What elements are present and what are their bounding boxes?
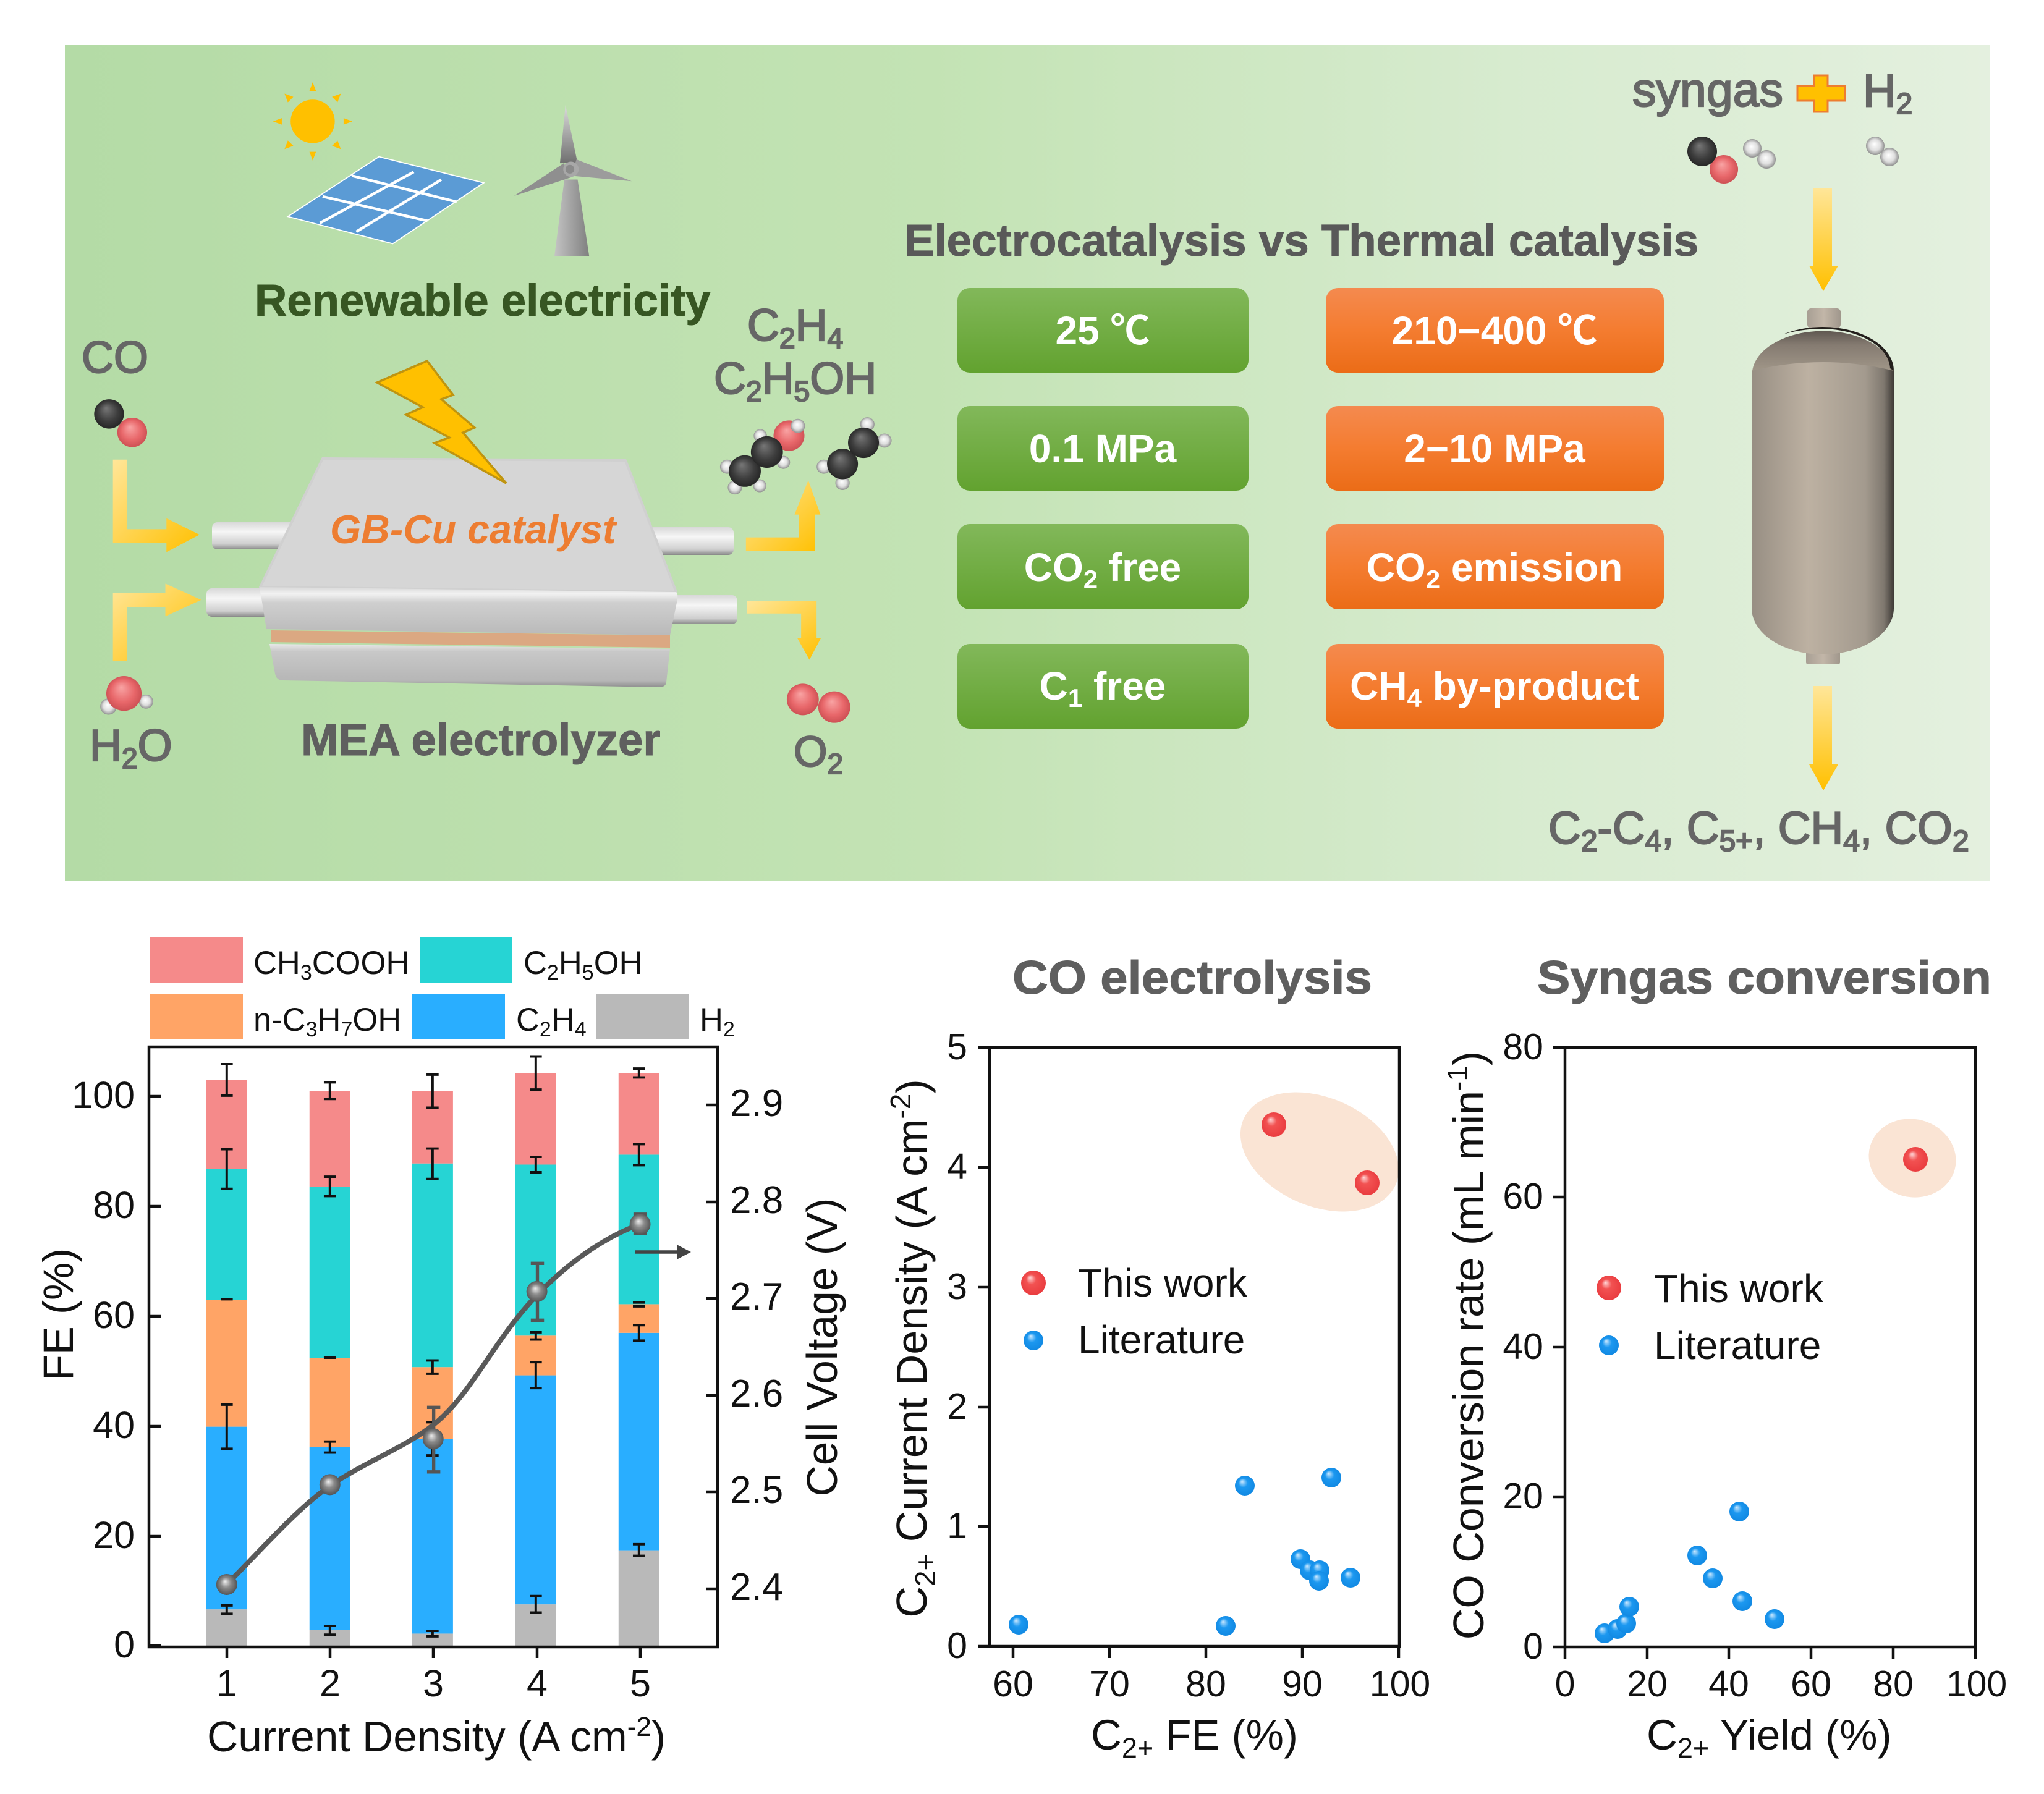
axes frame (149, 1047, 718, 1658)
label: ethylene: 4 (828, 322, 843, 354)
icon: plus (1797, 75, 1845, 112)
legend: products: C (524, 945, 547, 981)
axis title: C2+ FE: C (1091, 1711, 1122, 1759)
label: oxygen: O (794, 727, 827, 776)
label: ethanol: 5 (794, 375, 810, 407)
icon: CO molecule (94, 399, 147, 447)
label: syngas: syngas (1632, 64, 1783, 117)
label: thermal products: 4 (1645, 825, 1661, 858)
chart: Faradaic efficiency stacked bars (35, 937, 846, 1761)
axis title: C2+ yield: 2+ (1677, 1732, 1709, 1764)
card: pressure 2-10 (1326, 406, 1664, 491)
axis title: C2+ FE: 2+ (1122, 1732, 1153, 1764)
axis title: CO conversion rate: -1 (1441, 1065, 1474, 1091)
arrow: CO feed (113, 460, 200, 552)
legend: products: H (318, 1002, 341, 1038)
label: thermal products: , CH (1753, 803, 1843, 853)
heading: renewable electricity: Renewable electricity (255, 276, 710, 326)
heading: syngas conversion: Syngas conversion (1537, 952, 1991, 1004)
FE axis numbers: 40 (93, 1404, 135, 1446)
y axis numbers (947, 1026, 967, 1666)
y axis numbers: 1 (947, 1505, 967, 1546)
label: hydrogen: H (1863, 65, 1896, 116)
point: this work (1903, 1147, 1928, 1172)
voltage axis numbers: 2.7 (730, 1276, 783, 1318)
points: this work (1262, 1112, 1380, 1195)
axis title: C2+ yield: C (1647, 1711, 1677, 1759)
legend: products: H (551, 1002, 575, 1038)
label: ethanol: H (762, 354, 794, 404)
axis title: C2+ yield: Yield (%) (1709, 1711, 1891, 1759)
card: CO2 emission: CO (1367, 545, 1426, 590)
comparison: thermal catalysis conditions (1326, 288, 1664, 729)
card: CO2 free: CO (1024, 545, 1083, 590)
arrow: water feed (113, 583, 201, 661)
y axis numbers: 60 (1503, 1176, 1543, 1217)
card: CO2 free (957, 524, 1249, 609)
chart: syngas conversion scatter (1441, 1026, 2007, 1764)
voltage axis numbers: 2.6 (730, 1373, 783, 1415)
legend: products: 2 (547, 961, 559, 984)
axis title: C2+ FE: FE (%) (1153, 1711, 1298, 1759)
voltage axis numbers: 2.4 (730, 1566, 783, 1609)
label: water: O (138, 721, 172, 771)
legend: Literature (1078, 1318, 1245, 1362)
arrow: feed into reactor (1809, 188, 1838, 291)
y axis numbers: 3 (947, 1266, 967, 1307)
arrowhead (677, 1245, 691, 1259)
voltage axis numbers: 2.9 (730, 1082, 783, 1125)
heading: electrocatalysis vs thermal catalysis: Electrocatalysis vs Thermal catalysis (904, 216, 1698, 266)
y axis numbers: 5 (947, 1026, 967, 1067)
label: thermal products: C (1548, 803, 1581, 853)
label: ethylene: H (795, 301, 828, 350)
arrow: out of reactor (1809, 686, 1838, 790)
label: water: H (90, 721, 122, 771)
label: thermal products: , C (1661, 803, 1719, 853)
FE axis numbers: 100 (72, 1074, 135, 1116)
label: thermal products: 2 (1953, 825, 1969, 858)
x axis numbers: 80 (1873, 1664, 1914, 1704)
axes frame (1553, 1047, 1975, 1659)
axis title: current density: Current Density (A cm (207, 1712, 627, 1761)
diagram: thermal reactor tank (1752, 308, 1894, 664)
bar: 1 A cm-2 (206, 1064, 247, 1646)
x axis numbers: 100 (1946, 1664, 2007, 1704)
current density axis numbers: 1 (216, 1662, 237, 1704)
label: oxygen: 2 (827, 748, 843, 780)
y axis numbers: 4 (947, 1146, 967, 1187)
highlight ellipse (1222, 1070, 1417, 1234)
icon: wind turbine (514, 105, 632, 256)
arrow: oxygen outlet down (747, 601, 821, 660)
label: hydrogen: 2 (1896, 88, 1912, 121)
x axis numbers: 80 (1185, 1664, 1226, 1704)
label: thermal products: -C (1597, 803, 1645, 853)
chart: CO electrolysis scatter (884, 1026, 1430, 1764)
y axis numbers (1503, 1026, 1543, 1667)
axis title: C2+ current density: C (888, 1586, 936, 1618)
card: C1 free: C (1040, 664, 1068, 708)
axis title: C2+ current density: ) (888, 1079, 936, 1094)
icon: lightning bolt (377, 361, 506, 483)
panel: process overview (65, 45, 1990, 881)
FE axis numbers: 80 (93, 1184, 135, 1226)
x axis numbers (1555, 1664, 2007, 1704)
legend: products: 3 (306, 1018, 318, 1041)
x axis numbers: 90 (1282, 1664, 1323, 1704)
label: ethanol: C (714, 354, 746, 404)
diagram: MEA electrolyzer (206, 459, 737, 687)
label: catalyst: GB-Cu catalyst (330, 507, 617, 552)
y axis numbers: 0 (1523, 1626, 1543, 1667)
y axis numbers: 80 (1503, 1026, 1543, 1067)
card: C1 free: 1 (1068, 683, 1082, 713)
label: thermal products: 5+ (1719, 825, 1753, 858)
y axis numbers: 0 (947, 1625, 967, 1666)
card: pressure 0.1: 0.1 MPa (1029, 426, 1177, 471)
icon: oxygen molecule (787, 683, 850, 723)
arrow: product outlet up (746, 480, 820, 551)
legend: Literature (1654, 1323, 1821, 1368)
label: thermal products: 4 (1843, 825, 1860, 858)
legend: products: C (516, 1002, 540, 1038)
highlight ellipse (1860, 1109, 1965, 1207)
card: CO2 emission: emission (1440, 545, 1622, 590)
current density axis numbers: 4 (527, 1662, 548, 1704)
axis title: C2+ current density: -2 (884, 1094, 917, 1119)
voltage axis numbers: 2.8 (730, 1179, 783, 1222)
heading: CO electrolysis: CO electrolysis (1012, 952, 1372, 1004)
card: pressure 2-10: 2−10 MPa (1404, 426, 1585, 471)
legend: products: 7 (341, 1018, 352, 1041)
card: CO2 free: 2 (1083, 565, 1098, 594)
card: temperature 210-400: 210−400 ℃ (1392, 308, 1597, 353)
axis title: CO conversion rate: ) (1444, 1051, 1493, 1065)
legend: products: H (700, 1002, 723, 1038)
card: CH4 by-product: by-product (1422, 664, 1639, 708)
x axis numbers (993, 1664, 1430, 1704)
voltage axis numbers (730, 1082, 783, 1609)
legend (1021, 1261, 1248, 1362)
icon: ethylene molecule (816, 417, 892, 490)
card: CO2 free: free (1098, 545, 1181, 590)
comparison: electrocatalysis conditions (957, 288, 1249, 729)
FE axis numbers (72, 1074, 135, 1665)
label: ethanol: OH (810, 354, 876, 404)
x axis numbers: 20 (1627, 1664, 1668, 1704)
legend: products: 5 (582, 961, 594, 984)
points: literature (1595, 1502, 1784, 1643)
y axis numbers: 2 (947, 1386, 967, 1427)
icon: ethanol molecule (720, 419, 805, 494)
FE axis numbers: 20 (93, 1514, 135, 1556)
x axis numbers: 60 (993, 1664, 1033, 1704)
card: C1 free: free (1082, 664, 1166, 708)
legend (1597, 1266, 1824, 1368)
label: ethanol: 2 (746, 375, 762, 407)
label: ethylene: C (747, 301, 779, 350)
legend: This work (1078, 1261, 1248, 1305)
stacked bars with error bars (206, 1056, 659, 1646)
y axis numbers: 20 (1503, 1476, 1543, 1517)
bar: 2 A cm-2 (310, 1082, 350, 1646)
line: cell voltage (216, 1214, 651, 1595)
legend: products: CH (253, 945, 300, 981)
axis title: FE: FE (%) (35, 1248, 82, 1381)
axis title: C2+ current density: 2+ (909, 1554, 941, 1586)
icon: solar panel (288, 157, 484, 243)
legend: products: H (559, 945, 582, 981)
points: literature (1009, 1468, 1360, 1636)
card: CO2 emission: 2 (1426, 565, 1440, 594)
x axis numbers: 60 (1791, 1664, 1831, 1704)
x axis numbers: 100 (1370, 1664, 1430, 1704)
bar: 4 A cm-2 (515, 1056, 556, 1646)
current density axis numbers (216, 1662, 651, 1704)
label: water: 2 (122, 742, 138, 774)
axis title: current density: ) (651, 1712, 666, 1761)
current density axis numbers: 3 (423, 1662, 444, 1704)
label: ethylene: 2 (779, 322, 795, 354)
legend: products: n-C (253, 1002, 306, 1038)
label: MEA electrolyzer: MEA electrolyzer (301, 715, 661, 765)
card: CH4 by-product: CH (1350, 664, 1407, 708)
current density axis numbers: 2 (320, 1662, 341, 1704)
card: CH4 by-product: 4 (1407, 683, 1422, 713)
axis title: current density: -2 (627, 1712, 651, 1742)
card: temperature 210-400 (1326, 288, 1664, 373)
card: CO2 emission (1326, 524, 1664, 609)
arrow: points to voltage axis (635, 1250, 679, 1254)
axes frame (978, 1047, 1399, 1658)
icon: water molecule (100, 676, 153, 714)
axis title: cell voltage: Cell Voltage (V) (798, 1198, 846, 1496)
legend: products: COOH (312, 945, 409, 981)
icon: hydrogen molecule (1866, 137, 1899, 166)
x axis numbers: 40 (1708, 1664, 1749, 1704)
FE axis numbers: 60 (93, 1294, 135, 1336)
label: thermal products: , CO (1860, 803, 1953, 853)
icon: syngas molecules (1687, 137, 1776, 184)
bar: 5 A cm-2 (619, 1068, 659, 1646)
card: CH4 by-product (1326, 644, 1664, 729)
card: temperature 25: 25 ℃ (1056, 308, 1150, 353)
current density axis numbers: 5 (630, 1662, 651, 1704)
legend: products: 2 (723, 1018, 735, 1041)
legend: products: 2 (540, 1018, 551, 1041)
legend: products: OH (352, 1002, 401, 1038)
label: CO: CO (82, 333, 148, 383)
x axis numbers: 70 (1089, 1664, 1130, 1704)
y axis numbers: 40 (1503, 1326, 1543, 1367)
label: thermal products: 2 (1581, 825, 1597, 858)
FE axis numbers: 0 (114, 1623, 135, 1665)
legend: products: OH (594, 945, 642, 981)
card: temperature 25 (957, 288, 1249, 373)
legend: products: 3 (300, 961, 312, 984)
card: C1 free (957, 644, 1249, 729)
voltage axis numbers: 2.5 (730, 1469, 783, 1512)
card: pressure 0.1 (957, 406, 1249, 491)
bar: 3 A cm-2 (412, 1075, 453, 1646)
legend: products: 4 (575, 1018, 587, 1041)
legend: products (150, 937, 735, 1041)
icon: sun (273, 82, 352, 161)
axis title: CO conversion rate: CO Conversion rate (mL min (1444, 1091, 1493, 1640)
x axis numbers: 0 (1555, 1664, 1575, 1704)
axis title: C2+ current density: Current Density (A cm (888, 1119, 936, 1554)
legend: This work (1654, 1266, 1824, 1311)
